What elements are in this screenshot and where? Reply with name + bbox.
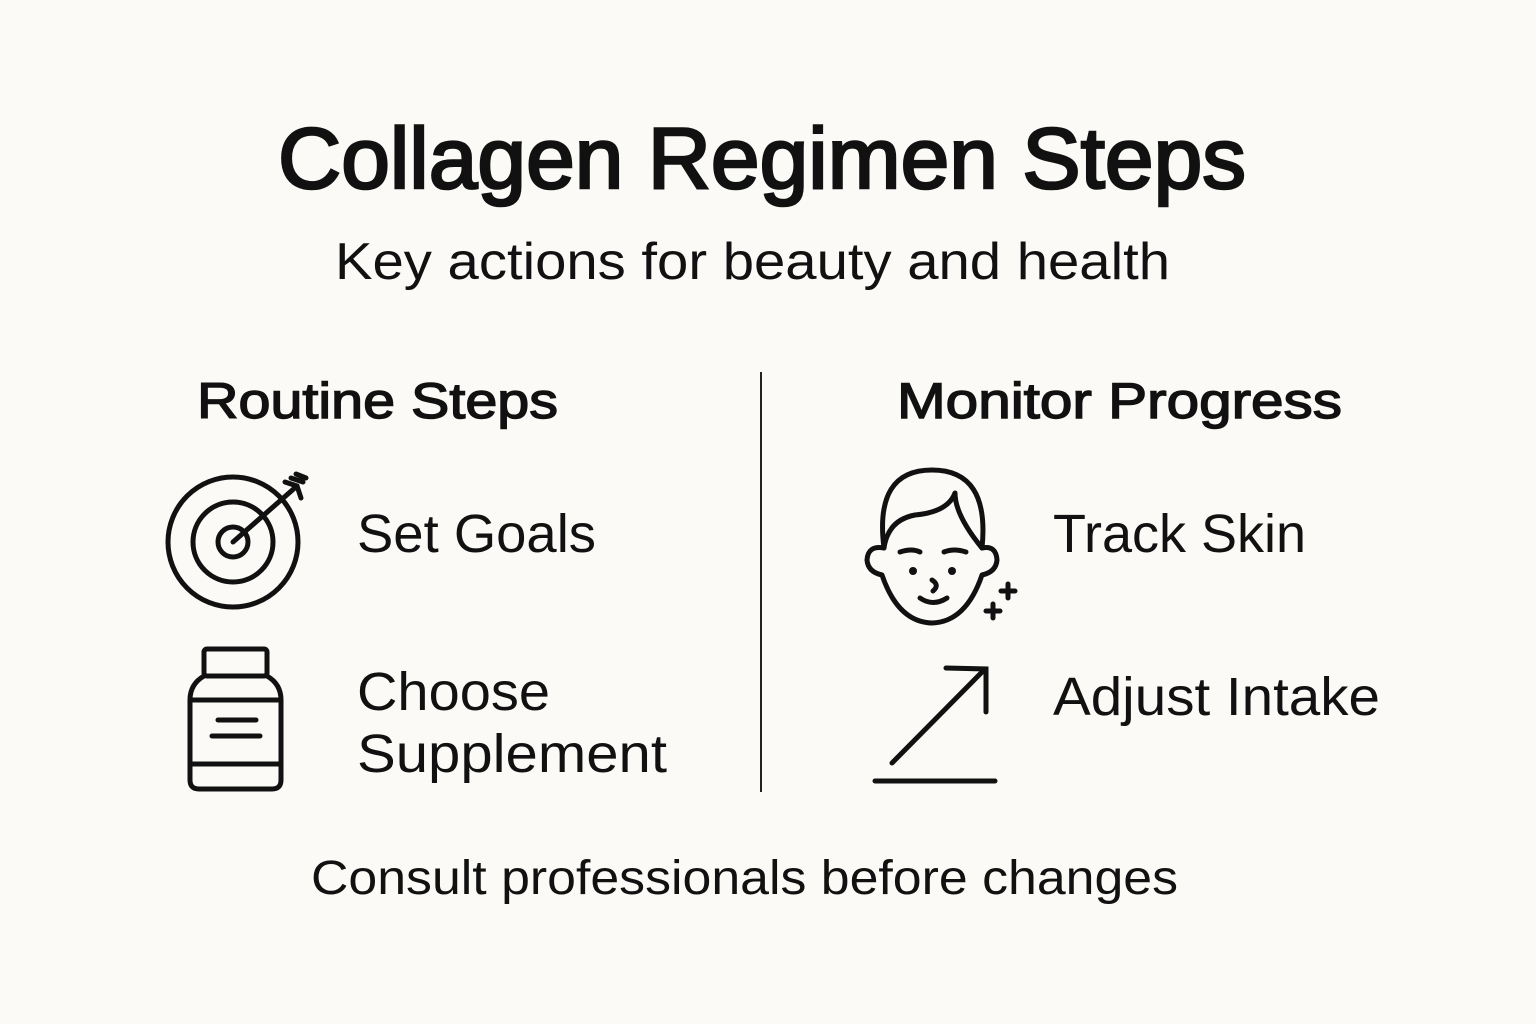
text: adjust intake: Adjust Intake (1053, 667, 1380, 727)
icon: bottle (190, 649, 281, 789)
heading: routine steps: Routine Steps (197, 373, 558, 429)
text: choose supplement: Supplement (357, 724, 667, 784)
icon: face (867, 470, 1015, 623)
icon: target (168, 474, 306, 607)
text: choose supplement (357, 662, 667, 784)
text: set goals: Set Goals (357, 504, 596, 564)
icon: rising arrow (875, 668, 995, 781)
subtitle: Key actions for beauty and health (335, 233, 1170, 291)
footer: Consult professionals before changes (311, 852, 1178, 905)
heading: monitor progress: Monitor Progress (897, 373, 1342, 429)
text: track skin: Track Skin (1053, 504, 1306, 564)
text: choose supplement: Choose (357, 662, 550, 722)
title: Collagen Regimen Steps (278, 111, 1246, 207)
